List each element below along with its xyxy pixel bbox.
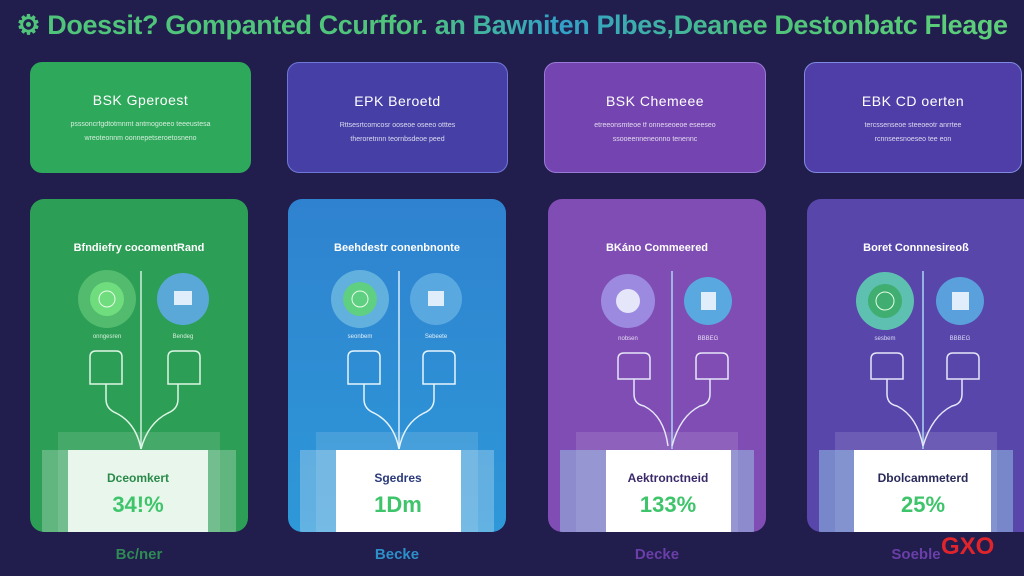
panel: top card 4: EBK CD oerten [862, 93, 964, 109]
panel: top card 3: etreeonsmteoe tf onneseoeoe eseeseo [594, 122, 716, 129]
panel: bottom card 3: BBBEG [698, 336, 719, 342]
label: card 1 footer: Bc/ner [116, 546, 162, 563]
panel: bottom card 1 [30, 199, 248, 532]
panel: bottom card 3: nobsen [618, 336, 638, 342]
panel: top card 2: EPK Beroetd [354, 93, 441, 109]
panel: top card 1: BSK Gperoest [93, 92, 188, 108]
panel: top card 4 [804, 62, 1022, 173]
panel: top card 3: BSK Chemeee [606, 93, 704, 109]
panel: bottom card 2 [288, 199, 506, 532]
panel: top card 3 [544, 62, 766, 173]
panel: top card 2: Rttsesrtcomcosr ooseoe oseeo otttes [340, 122, 455, 129]
panel: bottom card 1: Bfndiefry cocomentRand [74, 242, 204, 254]
panel: bottom card 3: BKáno Commeered [606, 242, 708, 254]
panel: top card 1 [30, 62, 251, 173]
panel: top card 4: rcnnseesnoeseo tee eon [875, 136, 951, 143]
panel: bottom card 3 [548, 199, 766, 532]
panel: top card 4: tercssenseoe steeoeotr anrrtee [865, 122, 961, 129]
panel: bottom card 2: Sgedres [374, 471, 422, 485]
panel: bottom card 3: 133% [640, 492, 696, 517]
panel: bottom card 3: Aektronctneid [628, 471, 708, 485]
title: ⚙ Doessit? Gompanted Ccurffor. an Bawniten Plbes,Deanee Destonbatc Fleage [16, 10, 1008, 40]
panel: bottom card 4: Dbolcammeterd [878, 471, 968, 485]
panel: bottom card 1: Dceomkert [107, 471, 169, 485]
label: card 3 footer: Decke [635, 546, 679, 563]
panel: bottom card 4: Boret Connnesireoß [863, 242, 969, 254]
panel: bottom card 4: sesbem [874, 336, 896, 342]
label: card 2 footer: Becke [375, 546, 419, 563]
panel: bottom card 2: Sebeete [425, 334, 448, 340]
panel: bottom card 1: onngesren [93, 334, 121, 340]
panel: bottom card 2: 1Dm [374, 492, 422, 517]
panel: bottom card 4: 25% [901, 492, 945, 517]
watermark logo: GXO [941, 533, 994, 560]
panel: top card 1: wreoteonnm oonnepetseroetosneno [84, 135, 197, 142]
panel: top card 2 [287, 62, 508, 173]
panel: bottom card 2: seonbem [348, 334, 372, 340]
panel: bottom card 4: BBBEG [950, 336, 971, 342]
label: card 4 footer: Soeble [891, 546, 941, 563]
panel: bottom card 4 [807, 199, 1024, 532]
panel: bottom card 2: Beehdestr conenbnonte [334, 242, 460, 254]
panel: bottom card 1: 34!% [112, 492, 164, 517]
panel: bottom card 1: Bendeg [173, 334, 193, 340]
panel: top card 1: psssoncrfgdtotmnmt antmogoeeo teeeustesa [70, 121, 211, 128]
panel: top card 3: ssooeenneneonno tenennc [613, 136, 697, 143]
panel: top card 2: theroretnnn teornbsdeoe peed [350, 136, 445, 143]
